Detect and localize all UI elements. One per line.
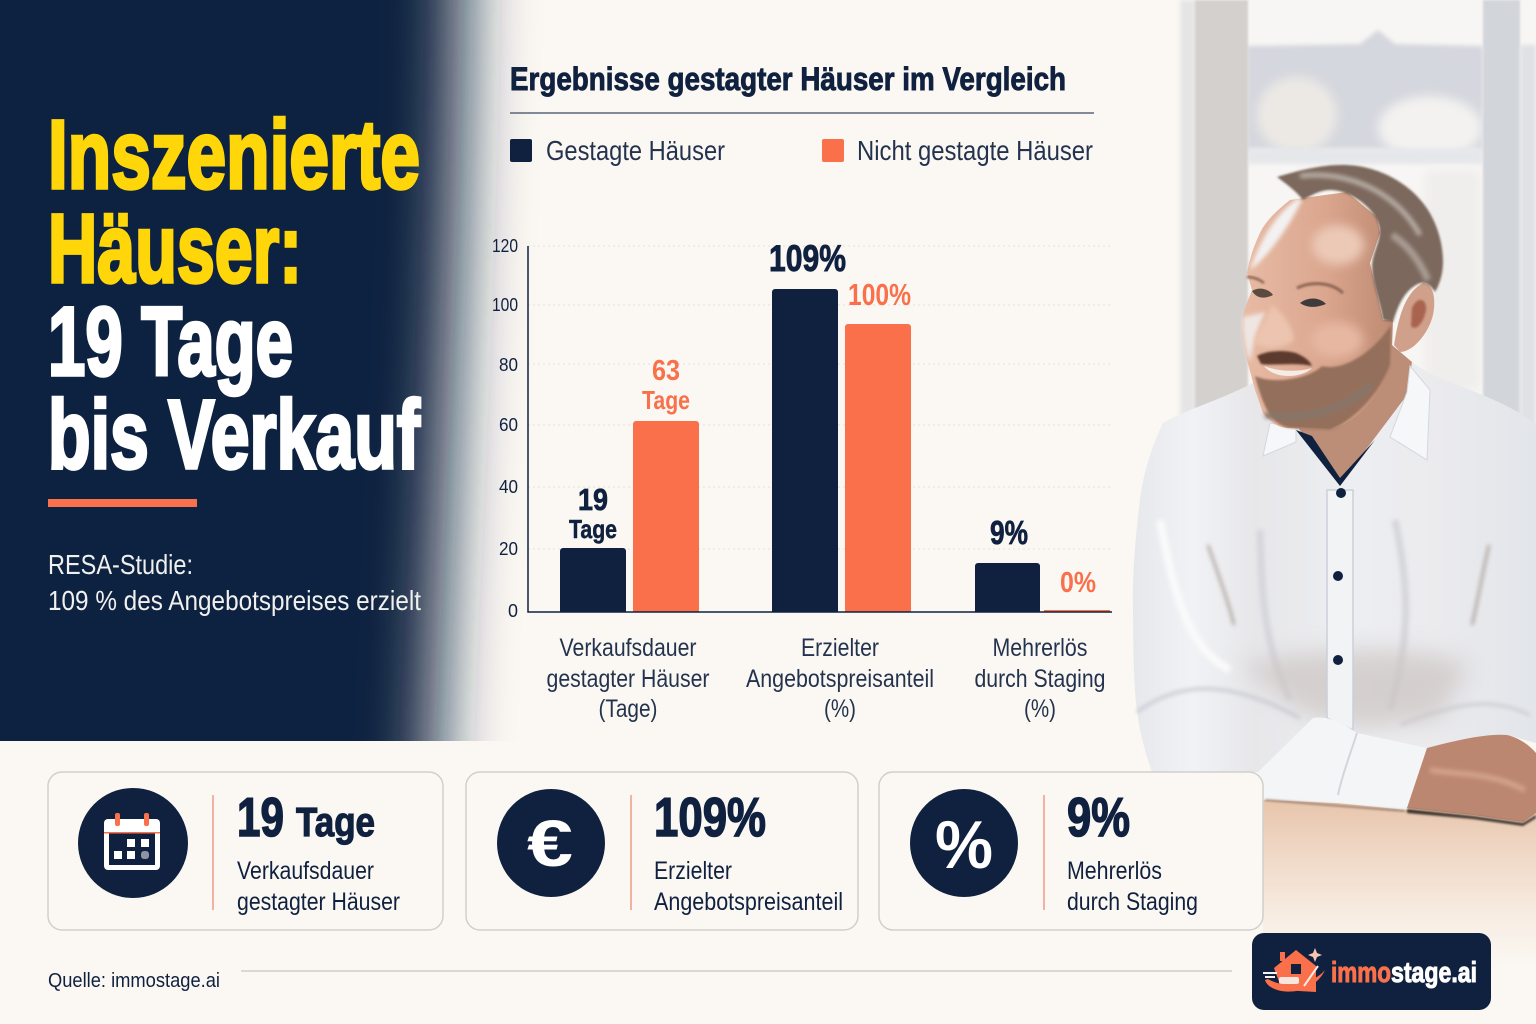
bars: [560, 289, 1110, 612]
cuff: [1258, 717, 1427, 810]
category labels: Erzielter: [801, 634, 879, 662]
KPI card: Verkaufsdauer: gestagter Häuser: [237, 888, 400, 916]
table shadow: [1265, 800, 1405, 811]
value labels: 100%: [848, 277, 911, 312]
category labels: [546, 634, 1106, 723]
table: [1263, 795, 1536, 970]
left navy panel: [0, 0, 520, 741]
person photo illustration: [1133, 165, 1536, 970]
inner collar lining: [1296, 430, 1375, 486]
KPI card: Mehrerlös: Mehrerlös: [1067, 857, 1162, 885]
shirt buttons: [1336, 488, 1346, 498]
KPI card: Verkaufsdauer: [48, 772, 443, 930]
y axis labels: 60: [499, 415, 518, 435]
KPI card: Verkaufsdauer: 19: [237, 786, 284, 848]
KPI card: Angebotspreisanteil: Angebotspreisanteil: [654, 888, 843, 916]
category labels: Mehrerlös: [992, 634, 1088, 662]
smile: [1264, 366, 1312, 376]
logo badge: stage.ai: [1391, 957, 1477, 989]
icon: percent: [910, 789, 1018, 897]
value labels: [569, 238, 1096, 599]
value labels: 19: [578, 482, 608, 517]
KPI card: Angebotspreisanteil: [466, 772, 858, 930]
moustache: [1257, 351, 1312, 366]
KPI card: Angebotspreisanteil: Erzielter: [654, 857, 732, 885]
KPI card: Angebotspreisanteil: 109%: [654, 786, 766, 848]
value labels: 109%: [769, 238, 846, 279]
y axis labels: 0: [508, 601, 518, 621]
KPI card: Mehrerlös: durch Staging: [1067, 888, 1198, 916]
source note: Quelle: immostage.ai: [48, 970, 220, 992]
category labels: Angebotspreisanteil: [746, 665, 934, 693]
eyebrows: [1247, 277, 1264, 283]
y axis labels: 80: [499, 355, 518, 375]
shirt: [1133, 363, 1536, 810]
value labels: 9%: [990, 514, 1028, 551]
shirt folds: [1137, 520, 1530, 725]
icon: calendar: [78, 788, 188, 898]
y axis labels: 40: [499, 477, 518, 497]
icon: house: [1263, 948, 1325, 992]
eyes: [1252, 289, 1273, 298]
category labels: durch Staging: [974, 665, 1106, 693]
shirt shadow at waist: [1240, 650, 1470, 730]
value labels: 0%: [1060, 567, 1096, 599]
hair: [1277, 165, 1443, 322]
category labels: gestagter Häuser: [546, 665, 710, 693]
KPI card: Mehrerlös: [879, 772, 1263, 930]
y axis labels: 20: [499, 539, 518, 559]
y axis labels: [492, 236, 518, 621]
icon: euro: [497, 789, 605, 897]
legend: Nicht gestagte Häuser: [857, 135, 1093, 166]
beard: [1255, 325, 1391, 430]
KPI card: Mehrerlös: 9%: [1067, 786, 1130, 848]
category labels: (%): [1024, 695, 1056, 723]
button placket: [1327, 490, 1353, 730]
title: Inszenierte: [48, 100, 420, 209]
wordmark: immo: [1331, 957, 1391, 989]
category labels: (%): [824, 695, 856, 723]
icon: percent: %: [935, 807, 993, 883]
bar chart: [492, 236, 1112, 723]
background window photo: [1150, 0, 1536, 470]
title: Häuser:: [48, 194, 302, 303]
legend: [510, 135, 1093, 166]
y axis labels: 120: [492, 236, 518, 256]
collar: [1263, 423, 1296, 456]
KPI card: Verkaufsdauer: Verkaufsdauer: [237, 857, 374, 885]
category labels: Verkaufsdauer: [560, 634, 696, 662]
title: [48, 100, 420, 489]
subtitle: 109 % des Angebotspreises erzielt: [48, 585, 421, 616]
ear: [1394, 283, 1434, 352]
icon: euro: €: [527, 806, 573, 880]
title: bis Verkauf: [48, 380, 420, 489]
subtitle: [48, 549, 421, 616]
legend: Gestagte Häuser: [546, 135, 725, 166]
KPI card: Verkaufsdauer: Tage: [296, 799, 375, 845]
hand: [1407, 735, 1536, 822]
logo badge: [1252, 933, 1491, 1010]
subtitle: RESA-Studie:: [48, 549, 193, 580]
nose: [1254, 305, 1294, 348]
category labels: (Tage): [598, 695, 658, 723]
face highlights: [1312, 225, 1364, 265]
y axis labels: 100: [492, 295, 518, 315]
value labels: Tage: [642, 385, 690, 415]
title: 19 Tage: [48, 287, 293, 396]
neck: [1296, 345, 1412, 484]
face: [1242, 192, 1393, 430]
axes: [528, 246, 1112, 612]
chart heading: Ergebnisse gestagter Häuser im Vergleich: [510, 61, 1066, 97]
value labels: Tage: [569, 514, 617, 544]
value labels: 63: [652, 355, 680, 387]
title accent bar: [48, 499, 197, 507]
